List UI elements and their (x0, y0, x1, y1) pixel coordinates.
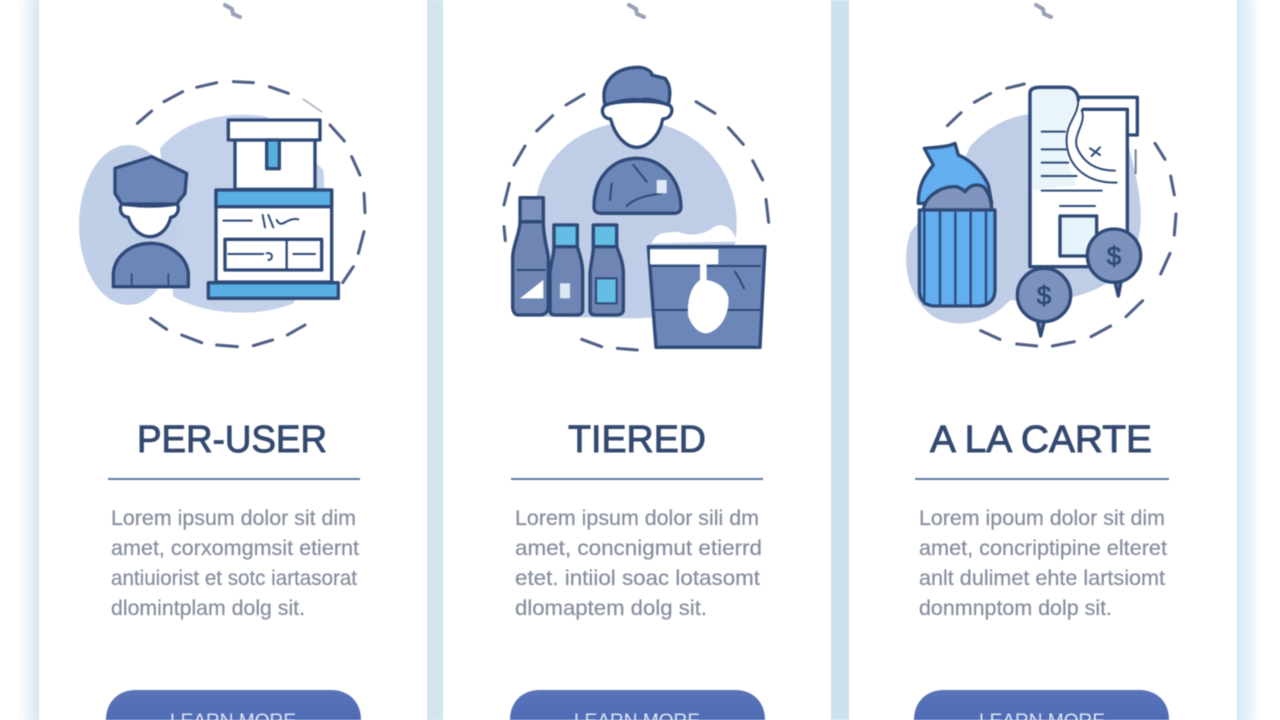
panel: per-user (39, 0, 427, 720)
icon: user with bottles and bucket (504, 67, 769, 350)
text block: tiered description (515, 507, 762, 620)
button: per-user learn more (106, 690, 361, 720)
text block: per-user description: amet, corxomgmsit etiernt (111, 537, 359, 560)
text block: tiered description: dlomaptem dolg sit. (515, 597, 707, 620)
text block: per-user description (111, 507, 359, 620)
text block: a la carte description (919, 507, 1167, 620)
button: tiered learn more (510, 690, 765, 720)
icon: top clip mark (1036, 5, 1051, 17)
heading: a la carte: A LA CARTE (930, 419, 1152, 461)
text block: tiered description: etet. intiiol soac lotasomt (515, 567, 760, 590)
icon: coin right: $ (1107, 241, 1122, 271)
text block: per-user description: Lorem ipsum dolor sit dim (111, 507, 356, 530)
icon: coin right (1087, 229, 1141, 282)
icon: top clip mark (225, 5, 240, 17)
icon: coin left: $ (1037, 280, 1052, 310)
button: a la carte learn more (914, 690, 1169, 720)
heading: per-user: PER-USER (137, 419, 327, 461)
icon: top clip mark (629, 5, 644, 17)
text block: a la carte description: anlt dulimet ehte lartsiomt (919, 567, 1165, 590)
heading: tiered: TIERED (568, 419, 706, 461)
text block: tiered description: amet, concnigmut etierrd (515, 537, 762, 560)
text block: per-user description: antiuiorist et sotc iartasorat (111, 567, 357, 590)
panel: tiered (443, 0, 831, 720)
icon: user and register (79, 82, 365, 347)
text block: per-user description: dlomintplam dolg sit. (111, 597, 305, 620)
icon: trash bag, receipt and coins (906, 84, 1176, 346)
panel: a la carte (849, 0, 1237, 720)
text block: tiered description: Lorem ipsum dolor sili dm (515, 507, 759, 530)
text block: a la carte description: amet, concriptipine elteret (919, 537, 1167, 560)
text block: a la carte description: Lorem ipoum dolor sit dim (919, 507, 1165, 530)
text block: a la carte description: donmnptom dolp sit. (919, 597, 1112, 620)
icon: coin left (1017, 268, 1071, 322)
